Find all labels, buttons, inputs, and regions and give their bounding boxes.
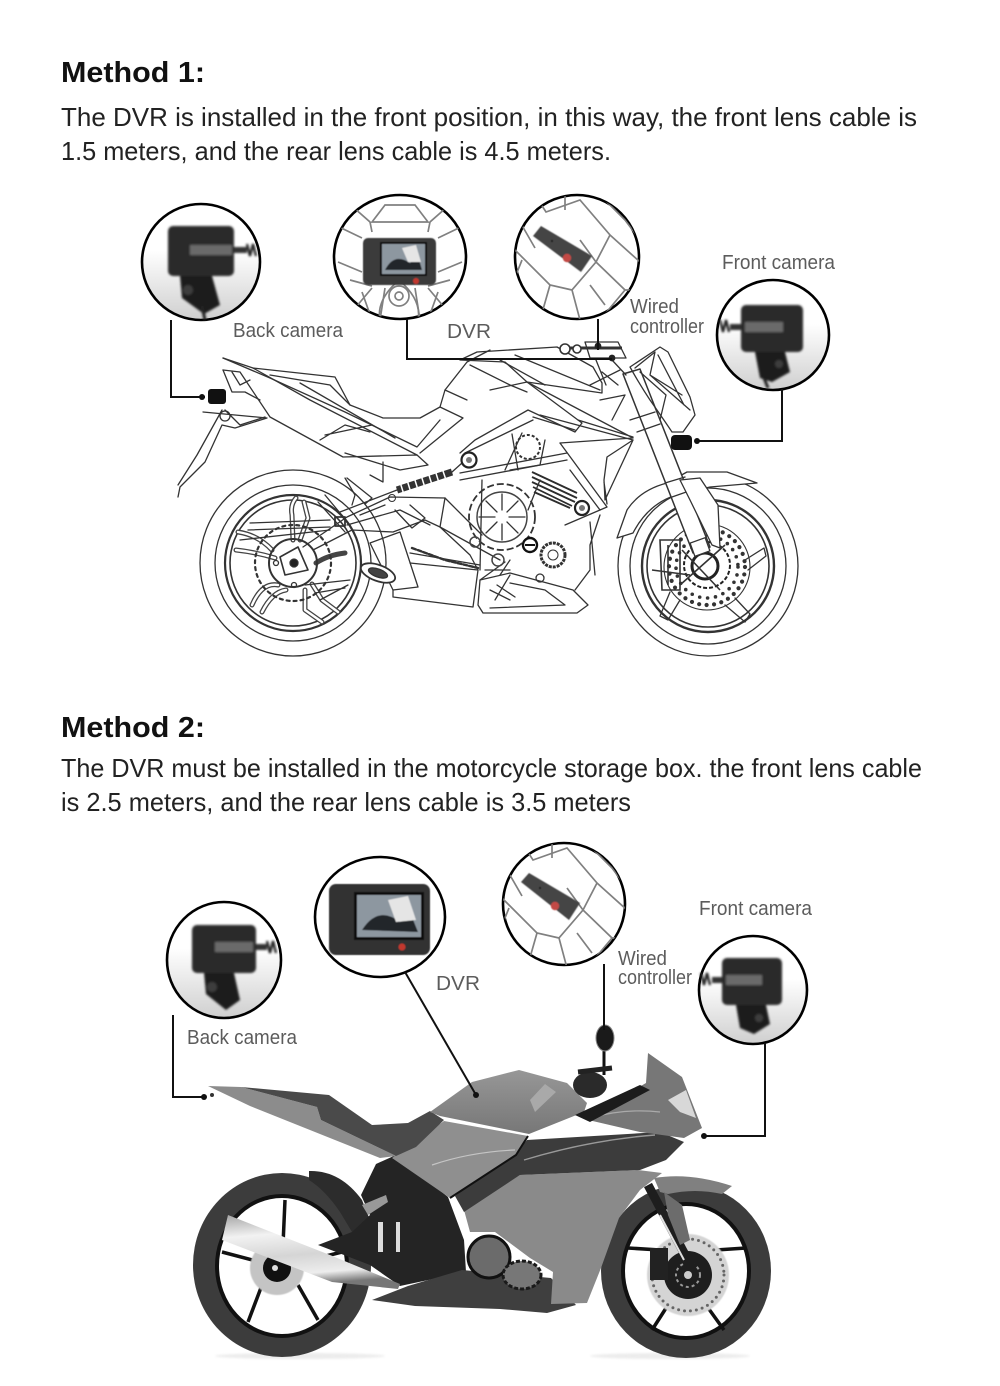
seat: [241, 1087, 444, 1156]
marker: back camera position: [199, 389, 226, 404]
front wheel: [618, 476, 798, 656]
belly pan: [372, 1270, 576, 1313]
callout: front camera: [699, 898, 813, 1139]
zoomed bike line art: [335, 200, 465, 320]
side panel: [392, 1121, 528, 1198]
connector: front camera line: [697, 389, 782, 441]
connector: controller line: [603, 964, 605, 1030]
marker: back camera position: [201, 1093, 214, 1100]
shock absorber: [340, 452, 476, 512]
rear subframe and tail: [178, 350, 490, 505]
controller device: [521, 873, 580, 920]
label: DVR: DVR: [436, 973, 480, 995]
exhaust and lower body: [358, 532, 480, 607]
DVR device: [329, 884, 430, 955]
nose fairing: [584, 1053, 702, 1138]
rear wheel: [193, 1173, 371, 1357]
callout: back camera: [167, 902, 298, 1100]
zoomed bike line art: [510, 195, 640, 320]
label: wired controller: Wired: [630, 296, 679, 318]
engine: [469, 435, 600, 590]
rear hugger: [309, 1171, 372, 1232]
section: method 2: [61, 712, 922, 1359]
illustration: line-art naked motorcycle: [178, 342, 798, 656]
label: wired controller: controller: [630, 316, 704, 338]
text block: method 2 description: [61, 753, 922, 817]
label: wired controller: controller: [618, 967, 692, 989]
callout: front camera: [671, 252, 836, 450]
swingarm: [303, 495, 500, 570]
callout: DVR: [315, 857, 480, 1098]
front fork and fender: [648, 1176, 732, 1268]
connector: back camera line: [173, 1015, 205, 1097]
front wheel: [601, 1184, 771, 1358]
brake disc: [652, 524, 750, 610]
DVR device: [363, 238, 436, 285]
engine covers: [468, 1236, 541, 1289]
mid dark panel: [455, 1132, 684, 1212]
marker: front camera position: [671, 435, 700, 450]
illustration: grey sport motorcycle: [193, 1025, 771, 1359]
callout: back camera: [142, 204, 344, 404]
label: front camera: Front camera: [699, 898, 813, 920]
fender: [617, 472, 757, 538]
connector: back camera line: [171, 320, 205, 397]
text block: method 2 description: is 2.5 meters, and the rear lens cable is 3.5 meters: [61, 787, 631, 817]
text block: method 1 description: 1.5 meters, and the rear lens cable is 4.5 meters.: [61, 136, 611, 166]
text block: method 1 description: [61, 102, 917, 166]
marker: DVR position: [473, 1092, 479, 1098]
belly pan: [478, 573, 588, 613]
handlebars and controls: [560, 342, 626, 385]
label: back camera: Back camera: [187, 1027, 298, 1049]
connector: DVR line: [407, 319, 612, 359]
label: DVR: DVR: [447, 321, 491, 343]
label: front camera: Front camera: [722, 252, 836, 274]
text block: method 2 description: The DVR must be installed in the motorcycle storage box. the front lens cable: [61, 753, 922, 783]
zoomed bike line art: [497, 843, 627, 968]
headlight shroud: [630, 347, 695, 432]
tank: [430, 1070, 587, 1134]
label: wired controller: [630, 296, 704, 338]
handlebar and mirror: [573, 1025, 614, 1098]
connector: front camera line: [704, 1043, 765, 1136]
lower fairing: [464, 1170, 662, 1304]
connector: DVR line: [405, 972, 476, 1095]
tank and radiator shroud: [460, 347, 633, 510]
callout: wired controller: [497, 843, 692, 1030]
fork: [623, 369, 720, 556]
connector: controller line: [597, 319, 599, 350]
ground shadow: [215, 1353, 750, 1359]
tail: [208, 1086, 396, 1158]
section: method 1: [61, 57, 917, 656]
label: back camera: Back camera: [233, 320, 344, 342]
heading: Method 1: Method 1:: [61, 57, 205, 89]
frame and swingarm: [318, 1155, 466, 1286]
text block: method 1 description: The DVR is installed in the front position, in this way, the front lens cable is: [61, 102, 917, 132]
callout: DVR: [334, 195, 612, 359]
heading: Method 2: Method 2:: [61, 712, 205, 744]
marker: front camera position: [701, 1133, 707, 1139]
label: wired controller: Wired: [618, 948, 667, 970]
label: wired controller: [618, 948, 692, 989]
rear wheel: [200, 470, 386, 656]
controller device: [533, 226, 592, 272]
callout: wired controller: [510, 195, 704, 350]
exhaust: [222, 1215, 400, 1289]
